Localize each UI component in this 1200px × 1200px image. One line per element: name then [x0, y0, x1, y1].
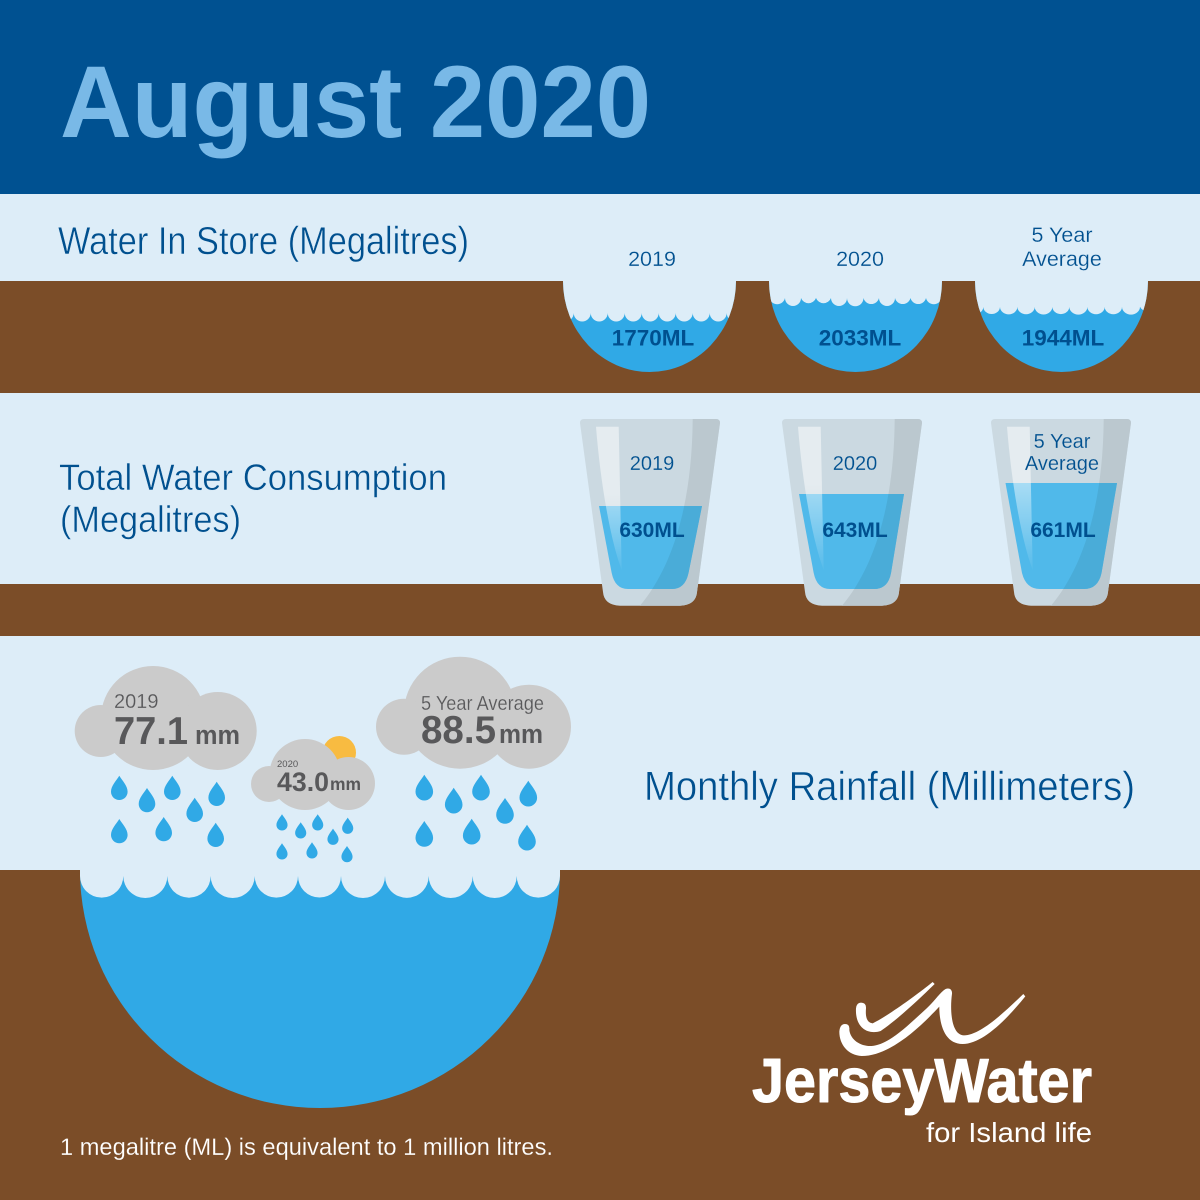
heading: total water consumption: (Megalitres)	[60, 499, 241, 540]
cloud label: 2020	[277, 759, 298, 770]
cloud 5 year average with rain	[376, 657, 571, 850]
reservoir 2019: 2019	[628, 247, 676, 271]
cloud shape	[251, 739, 375, 810]
glass 2019	[580, 419, 720, 606]
cloud label	[421, 693, 544, 752]
cloud label	[277, 759, 361, 797]
cloud label	[114, 691, 240, 753]
icon: wave swoosh	[839, 982, 1025, 1056]
logo tagline: for Island life	[926, 1117, 1092, 1148]
cloud 2020 with sun and rain	[251, 736, 375, 862]
cloud label: mm	[195, 722, 240, 750]
reservoir 5 year average	[975, 228, 1148, 372]
footnote: 1 megalitre (ML) is equivalent to 1 million litres.	[60, 1134, 553, 1161]
heading: monthly rainfall: Monthly Rainfall (Millimeters)	[644, 763, 1135, 809]
cloud label: 2019	[114, 691, 158, 713]
heading: total water consumption	[59, 457, 447, 540]
cloud label: 88.5	[421, 709, 496, 752]
reservoir 2019: 1770ML	[612, 326, 695, 350]
cloud label: mm	[499, 721, 543, 749]
glass 2020	[782, 419, 922, 606]
glass 5 year average: 5 Year	[1034, 431, 1091, 453]
reservoir 5 year average: Average	[1022, 247, 1102, 271]
icon: sun	[323, 736, 356, 769]
logo wordmark: JerseyWater	[752, 1047, 1092, 1116]
cloud shape	[75, 666, 257, 770]
glass 2020: 643ML	[822, 519, 888, 542]
rain drops	[416, 775, 537, 850]
header banner	[0, 0, 1200, 194]
cloud shape	[376, 657, 571, 769]
reservoir 2019	[563, 252, 736, 372]
reservoir 5 year average: 5 Year	[1032, 223, 1092, 247]
logo: Jersey Water	[752, 982, 1092, 1148]
reservoir 2020: 2020	[836, 247, 884, 271]
glass 5 year average	[991, 419, 1131, 606]
glass 5 year average: 661ML	[1030, 519, 1096, 542]
cloud label: mm	[330, 774, 361, 794]
reservoir 2020: 2033ML	[819, 326, 902, 350]
glass 2019: 630ML	[619, 519, 685, 542]
reservoir 2020	[769, 252, 942, 372]
rain drops	[276, 814, 353, 862]
reservoir 5 year average: 1944ML	[1022, 326, 1105, 350]
rain drops	[111, 776, 225, 847]
glass 2019: 2019	[630, 453, 674, 475]
title: August 2020	[60, 45, 651, 159]
cloud label: 5 Year Average	[421, 693, 544, 715]
large reservoir with scalloped water	[80, 869, 560, 1108]
glass 5 year average: Average	[1025, 453, 1099, 475]
heading: total water consumption: Total Water Consumption	[59, 457, 447, 498]
cloud label: 77.1	[114, 710, 188, 753]
cloud 2019 with rain	[75, 666, 257, 847]
glass 2020: 2020	[833, 453, 877, 475]
heading: water in store: Water In Store (Megalitres)	[58, 220, 469, 263]
cloud label: 43.0	[277, 767, 329, 797]
